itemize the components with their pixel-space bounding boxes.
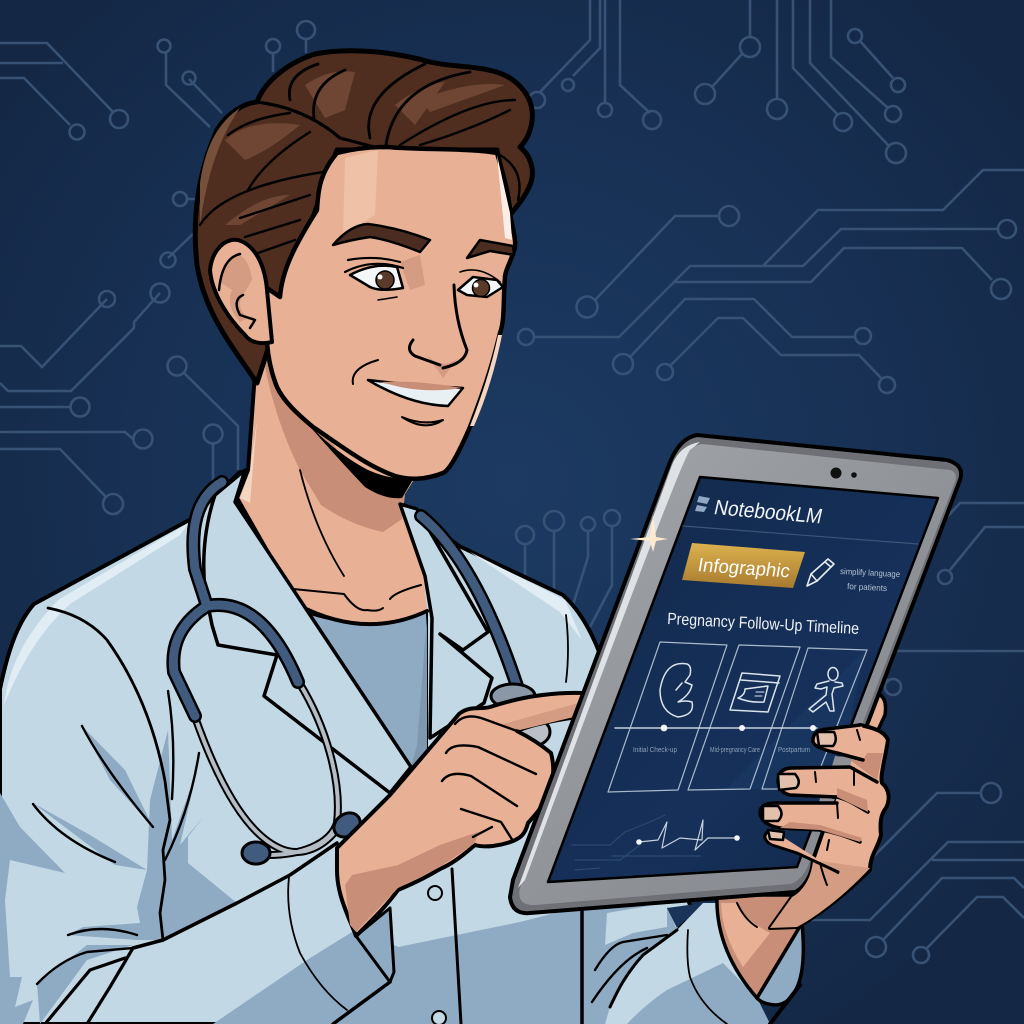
lower sleeve edge	[333, 982, 390, 1024]
icon: fetus	[660, 664, 692, 717]
head	[195, 51, 532, 479]
prompt note: for patients	[847, 581, 887, 593]
nose	[409, 285, 467, 368]
lab coat body	[0, 472, 690, 1024]
infographic badge	[682, 543, 805, 588]
app header: NotebookLM	[712, 496, 825, 528]
screen	[548, 477, 938, 882]
timeline labels	[633, 745, 810, 754]
holding hand	[760, 725, 889, 928]
face	[267, 147, 515, 479]
thumb behind tablet	[862, 693, 886, 732]
icon: pencil	[807, 559, 834, 586]
mouth	[353, 360, 463, 425]
prompt note	[840, 566, 901, 593]
fourth finger	[765, 830, 838, 872]
inner cuff of pointing arm	[356, 908, 394, 982]
ear	[210, 240, 272, 343]
neck	[237, 345, 427, 624]
eyebrows	[333, 224, 514, 258]
screen circuit decoration	[572, 815, 700, 870]
third finger	[760, 803, 868, 842]
icon: ultrasound screen	[730, 673, 780, 712]
infographic badge: Infographic	[696, 555, 792, 582]
timeline labels: Mid-pregnancy Care	[710, 745, 760, 754]
right sleeve	[605, 903, 770, 1024]
glint	[630, 515, 668, 552]
timeline line and dots	[615, 725, 817, 731]
hair	[195, 51, 532, 383]
first finger	[813, 725, 875, 760]
timeline labels: Initial Check-up	[633, 745, 677, 754]
tablet	[510, 435, 961, 913]
coat collar and lapels	[204, 470, 492, 793]
camera	[830, 468, 857, 478]
pointing hand	[337, 693, 584, 936]
app header	[683, 496, 918, 544]
icon: baby figure	[809, 668, 843, 712]
timeline labels: Postpartum	[778, 745, 810, 754]
timeline title: Pregnancy Follow-Up Timeline	[667, 610, 859, 638]
heartbeat line	[636, 820, 740, 850]
coat buttons	[428, 886, 446, 1024]
bezel	[519, 444, 956, 905]
fingernails	[763, 732, 836, 840]
second finger	[778, 767, 877, 812]
tablet body	[510, 435, 961, 913]
palm	[770, 725, 889, 928]
right wrist and cuff	[717, 895, 803, 1024]
stethoscope	[173, 482, 550, 864]
eyes	[345, 258, 503, 300]
prompt note: simplify language	[840, 566, 901, 579]
timeline cards	[608, 642, 867, 792]
t-shirt	[302, 611, 427, 767]
